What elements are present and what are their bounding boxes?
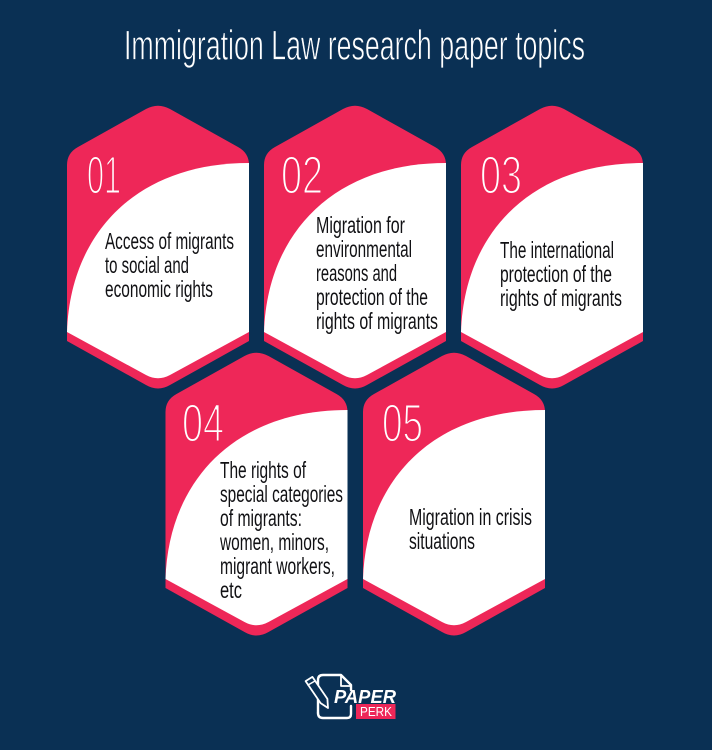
panel: topic 05: Migration in crisis: [409, 504, 532, 530]
logo wordmark: PAPER: [334, 687, 396, 707]
panel: topic 04: special categories: [220, 481, 343, 507]
panel: topic 01: 01: [87, 146, 121, 206]
panel: topic 03: protection of the: [500, 261, 612, 287]
panel: topic 02: 02: [281, 146, 323, 206]
panel: topic 05: situations: [409, 528, 475, 554]
panel: topic 03: The international: [500, 237, 614, 263]
logo badge: PERK: [360, 705, 393, 719]
panel: topic 03: rights of migrants: [500, 285, 622, 311]
panel: topic 05: [363, 353, 545, 636]
panel: topic 02: protection of the: [316, 284, 428, 310]
panel: topic 01: to social and: [105, 252, 189, 278]
panel: topic 01: Access of migrants: [105, 228, 234, 254]
panel: topic 03: [461, 106, 643, 388]
panel: topic 04: of migrants:: [220, 505, 302, 531]
panel: topic 04: etc: [220, 577, 242, 603]
panel: topic 04: The rights of: [220, 457, 306, 483]
panel: topic 02: Migration for: [316, 212, 405, 238]
panel: topic 02: [264, 106, 446, 388]
icon: document and pencil: [306, 675, 351, 718]
panel: topic 03: 03: [480, 146, 522, 206]
panel: topic 04: 04: [182, 394, 224, 454]
panel: topic 01: [67, 106, 249, 388]
panel: topic 02: reasons and: [316, 260, 397, 286]
panel: topic 04: migrant workers,: [220, 553, 335, 579]
panel: topic 04: women, minors,: [219, 529, 329, 555]
panel: topic 05: 05: [382, 394, 423, 454]
panel: topic 01: economic rights: [105, 276, 213, 302]
panel: topic 02: environmental: [316, 236, 412, 262]
panel: topic 04: [166, 353, 348, 636]
panel: topic 02: rights of migrants: [316, 308, 438, 334]
logo: Paper Perk: [306, 675, 396, 719]
